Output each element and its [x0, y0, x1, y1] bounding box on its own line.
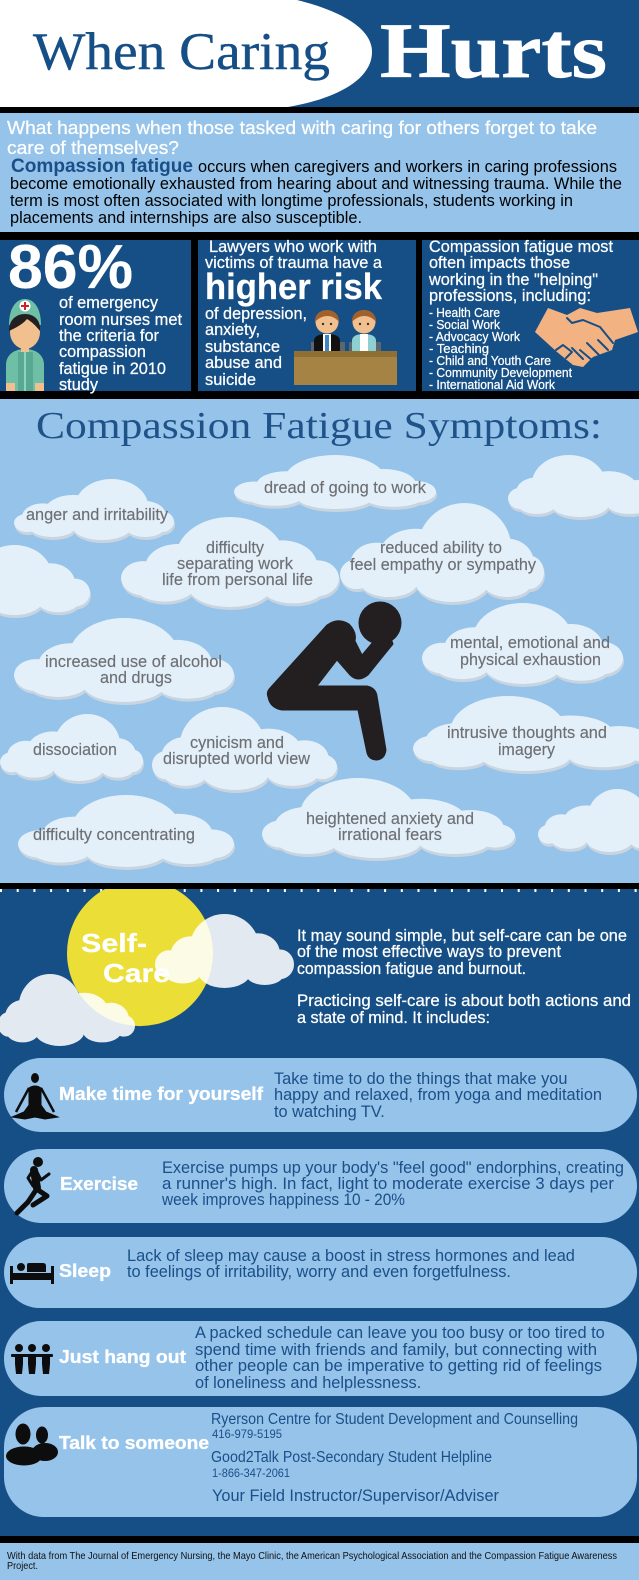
compassion fatigue definition: become emotionally exhausted from hearing about and witnessing trauma. While the — [10, 175, 622, 193]
self-care label — [81, 928, 170, 988]
cloud: cynicism: disrupted world view — [163, 749, 311, 768]
description: to watching TV. — [274, 1103, 385, 1121]
description — [195, 1324, 605, 1392]
description: A packed schedule can leave you too busy or too tired to — [195, 1324, 605, 1342]
intro question — [7, 117, 597, 158]
professions list: - Advocacy Work — [429, 329, 520, 344]
cloud: difficulty concentrating: difficulty concentrating — [33, 825, 195, 844]
description: a runner's high. In fact, light to moderate exercise 3 days per — [162, 1175, 615, 1193]
cloud: cynicism: cynicism and — [190, 733, 284, 752]
lawyers text: of depression, — [205, 304, 307, 323]
description — [127, 1247, 575, 1281]
cloud: cynicism — [152, 707, 338, 793]
helping professions intro: professions, including: — [429, 286, 591, 305]
cloud: increased use of alcohol and drugs — [14, 618, 235, 705]
cloud: anger and irritability: anger and irritability — [26, 505, 169, 524]
nurse statistic text: fatigue in 2010 — [59, 359, 166, 378]
helping professions intro: Compassion fatigue most — [429, 237, 613, 256]
compassion fatigue definition — [10, 155, 622, 227]
nurse statistic text: compassion — [59, 342, 146, 361]
cloud: heightened anxiety — [262, 778, 516, 861]
label: Sleep — [59, 1261, 111, 1281]
intro panel text — [7, 117, 622, 227]
cloud: reduced ability: reduced ability to — [380, 538, 502, 557]
compassion fatigue definition: placements and internships are also susceptible. — [10, 209, 362, 227]
panel: self-care — [0, 889, 639, 1536]
description: to feelings of irritability, worry and even forgetfulness. — [127, 1263, 511, 1281]
nurse statistic text: the criteria for — [59, 326, 159, 345]
title: When Caring: When Caring — [33, 23, 330, 81]
contacts: Your Field Instructor/Supervisor/Adviser — [212, 1487, 499, 1505]
cloud: dissociation — [0, 714, 144, 784]
self-care label: Care — [103, 958, 170, 988]
cloud: anger and irritability — [14, 479, 175, 543]
professions list: - Community Development — [429, 365, 572, 380]
description: Exercise pumps up your body's "feel good" endorphins, creating — [162, 1159, 624, 1177]
self-care intro text: compassion fatigue and burnout. — [297, 959, 526, 978]
lawyers text: substance — [205, 337, 280, 356]
intro question: What happens when those tasked with caring for others forget to take — [7, 117, 597, 138]
nurse statistic text: study — [59, 375, 98, 394]
cloud: mental emotional physical exhaustion: mental, emotional and — [450, 633, 610, 652]
cloud: dissociation: dissociation — [33, 740, 117, 759]
cloud: heightened anxiety: irrational fears — [338, 825, 442, 844]
header band — [0, 0, 639, 107]
lawyers text: higher risk — [205, 266, 383, 307]
icon: bed — [10, 1263, 54, 1284]
clouds without text — [0, 455, 639, 855]
professions list — [429, 305, 572, 392]
cloud: reduced ability — [340, 503, 545, 605]
panel: lawyers higher risk — [198, 237, 416, 391]
description: spend time with friends and family, but connecting with — [195, 1341, 597, 1359]
cloud: increased use of alcohol and drugs: and drugs — [100, 668, 172, 687]
cloud: difficulty separating work: separating work — [177, 554, 294, 573]
description: week improves happiness 10 - 20% — [161, 1191, 405, 1209]
description — [274, 1070, 602, 1121]
pill: just hang out — [4, 1321, 637, 1396]
label: Just hang out — [59, 1347, 186, 1367]
helping professions intro: often impacts those — [429, 253, 570, 272]
description: Lack of sleep may cause a boost in stress hormones and lead — [127, 1247, 575, 1265]
self-care intro text — [297, 926, 631, 1027]
cloud: difficulty separating work — [121, 517, 340, 610]
cloud: heightened anxiety: heightened anxiety and — [306, 809, 474, 828]
big number: 86% — [8, 233, 133, 302]
label: Exercise — [60, 1174, 138, 1194]
lawyers text — [205, 237, 383, 389]
cloud: increased use of alcohol and drugs: increased use of alcohol — [45, 652, 222, 671]
icon: nurse — [6, 299, 44, 391]
cloud: difficulty concentrating — [18, 795, 235, 870]
lawyers text: Lawyers who work with — [209, 237, 377, 256]
contacts: 416-979-5195 — [212, 1429, 282, 1441]
panel: helping professions — [422, 237, 639, 392]
icon: lawyers at desk — [294, 310, 397, 385]
icon: three people — [11, 1344, 53, 1374]
cloud: dread of going to work: dread of going to work — [264, 478, 427, 497]
cloud: dread of going to work — [234, 455, 437, 512]
helping professions intro: working in the "helping" — [428, 270, 598, 289]
self-care sun and clouds — [0, 889, 294, 1046]
professions list: - Teaching — [429, 341, 489, 356]
professions list: - Child and Youth Care — [429, 353, 551, 368]
lawyers text: anxiety, — [205, 320, 260, 339]
self-care intro text: Practicing self-care is about both actions and — [297, 991, 631, 1010]
icon: bowed figure — [267, 602, 402, 760]
pill: talk to someone — [4, 1407, 637, 1517]
professions list: - Health Care — [429, 305, 500, 320]
symptoms heading: Compassion Fatigue Symptoms: — [36, 405, 602, 447]
self-care intro text: It may sound simple, but self-care can be one — [297, 926, 627, 945]
icon: two silhouettes — [6, 1424, 58, 1466]
cloud: difficulty separating work: difficulty — [206, 538, 265, 557]
pill: sleep — [4, 1237, 637, 1308]
icon: handshake — [535, 308, 638, 367]
description: of loneliness and helplessness. — [195, 1374, 421, 1392]
description: other people can be imperative to getting rid of feelings — [195, 1357, 602, 1375]
icon: meditation — [12, 1073, 58, 1119]
icon: runner — [17, 1157, 49, 1213]
intro question: care of themselves? — [7, 137, 179, 158]
cloud: difficulty separating work: life from personal life — [162, 570, 313, 589]
contacts: 1-866-347-2061 — [212, 1468, 290, 1480]
cloud: intrusive thoughts: intrusive thoughts and — [447, 723, 607, 742]
label: Talk to someone — [59, 1433, 209, 1453]
label: Make time for yourself — [59, 1084, 264, 1104]
self-care intro text: a state of mind. It includes: — [297, 1008, 490, 1027]
professions list: - Social Work — [429, 317, 500, 332]
contacts — [211, 1411, 578, 1505]
professions list: - International Aid Work — [429, 377, 555, 392]
compassion fatigue definition: occurs when caregivers and workers in caring professions — [198, 158, 617, 176]
description — [161, 1159, 624, 1209]
lawyers text: abuse and — [205, 353, 282, 372]
lawyers text: suicide — [205, 370, 256, 389]
cloud: intrusive thoughts: imagery — [498, 740, 556, 759]
cloud: mental emotional physical exhaustion: physical exhaustion — [460, 650, 601, 669]
footer sources — [7, 1551, 617, 1572]
nurse statistic text: of emergency — [59, 293, 158, 312]
cloud: mental emotional physical exhaustion — [422, 603, 624, 687]
lawyers text: victims of trauma have a — [205, 253, 383, 272]
footer sources: Project. — [7, 1561, 38, 1572]
nurse statistic text — [59, 293, 182, 394]
title: Hurts: Hurts — [380, 7, 607, 94]
description: Take time to do the things that make you — [274, 1070, 567, 1088]
contacts: Good2Talk Post-Secondary Student Helpline — [211, 1449, 492, 1466]
compassion fatigue definition: term is most often associated with longtime professionals, students working in — [10, 192, 573, 210]
description: happy and relaxed, from yoga and meditation — [274, 1086, 602, 1104]
panel: 86% nurses — [0, 233, 191, 394]
pill: exercise — [4, 1149, 637, 1223]
helping professions intro — [428, 237, 613, 305]
cloud: reduced ability: feel empathy or sympathy — [350, 555, 537, 574]
self-care intro text: of the most effective ways to prevent — [297, 942, 561, 961]
self-care label: Self- — [81, 928, 147, 958]
compassion fatigue definition: Compassion fatigue — [11, 155, 193, 177]
contacts: Ryerson Centre for Student Development and Counselling — [211, 1411, 578, 1428]
cloud: intrusive thoughts — [413, 696, 639, 774]
nurse statistic text: room nurses met — [59, 310, 182, 329]
pill: make time for yourself — [4, 1058, 637, 1132]
